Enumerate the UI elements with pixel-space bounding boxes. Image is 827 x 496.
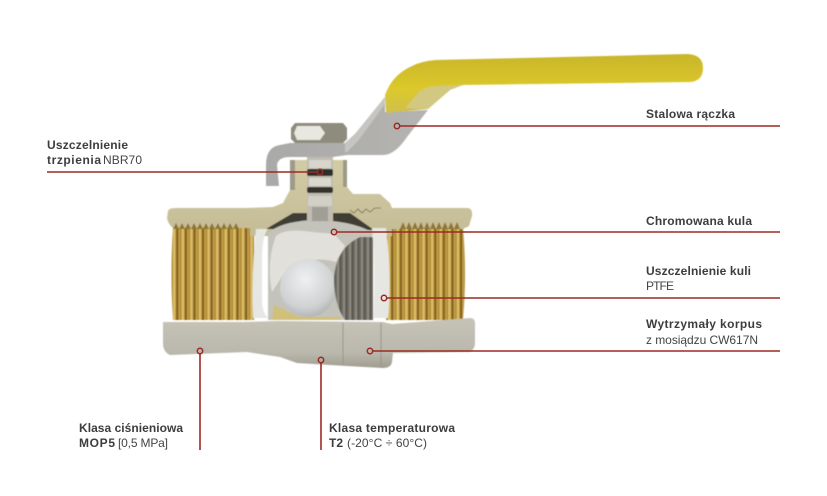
ball highlight [270, 231, 345, 292]
left PTFE seal [252, 229, 268, 318]
callout: temperature class: (-20°C ÷ 60°C) [347, 436, 427, 450]
hex nut [291, 123, 347, 143]
callout: chrome ball [331, 214, 780, 235]
thread teeth [173, 222, 460, 229]
lower body [163, 318, 475, 368]
body screw thread detail [350, 208, 381, 213]
callout: chrome ball: Chromowana kula [646, 214, 752, 228]
right internal thread [386, 226, 465, 320]
callout: pressure class [79, 348, 203, 450]
upper o-ring [307, 169, 333, 176]
neck shading [290, 160, 347, 190]
callout: steel handle: Stalowa rączka [646, 107, 735, 121]
callout: body: Wytrzymały korpus [646, 317, 762, 331]
yellow grip [385, 54, 703, 113]
callout: stem seal: trzpienia [47, 153, 101, 167]
stem [307, 157, 333, 222]
callout: body: z mosiądzu CW617N [646, 333, 758, 347]
callout: steel handle [394, 107, 780, 129]
callout: pressure class: [0,5 MPa] [118, 436, 168, 450]
callout: stem seal [47, 138, 323, 175]
steel handle [266, 97, 428, 186]
callout: pressure class: Klasa ciśnieniowa [79, 421, 183, 435]
callout: pressure class: MOP5 [79, 436, 115, 450]
callout: ball seal: PTFE [646, 279, 674, 293]
ball brass reflection [272, 305, 340, 320]
callout: ball seal [381, 264, 780, 301]
ball valve illustration [163, 54, 703, 368]
chrome ball [268, 220, 372, 320]
callout: stem seal: NBR70 [103, 153, 142, 167]
callout: temperature class [318, 357, 455, 450]
callout: body [367, 317, 780, 354]
callout: temperature class: Klasa temperaturowa [329, 421, 455, 435]
upper body cutaway [167, 160, 472, 236]
lower o-ring [307, 187, 333, 193]
ball bore sphere [280, 259, 336, 317]
callout: temperature class: T2 [329, 436, 343, 450]
ball bore opening [334, 237, 373, 320]
callout: stem seal: Uszczelnienie [47, 138, 128, 152]
left internal thread [172, 226, 254, 320]
callout: ball seal: Uszczelnienie kuli [646, 264, 751, 278]
ball cavity dark outline [266, 213, 374, 230]
right PTFE seal [372, 228, 390, 318]
